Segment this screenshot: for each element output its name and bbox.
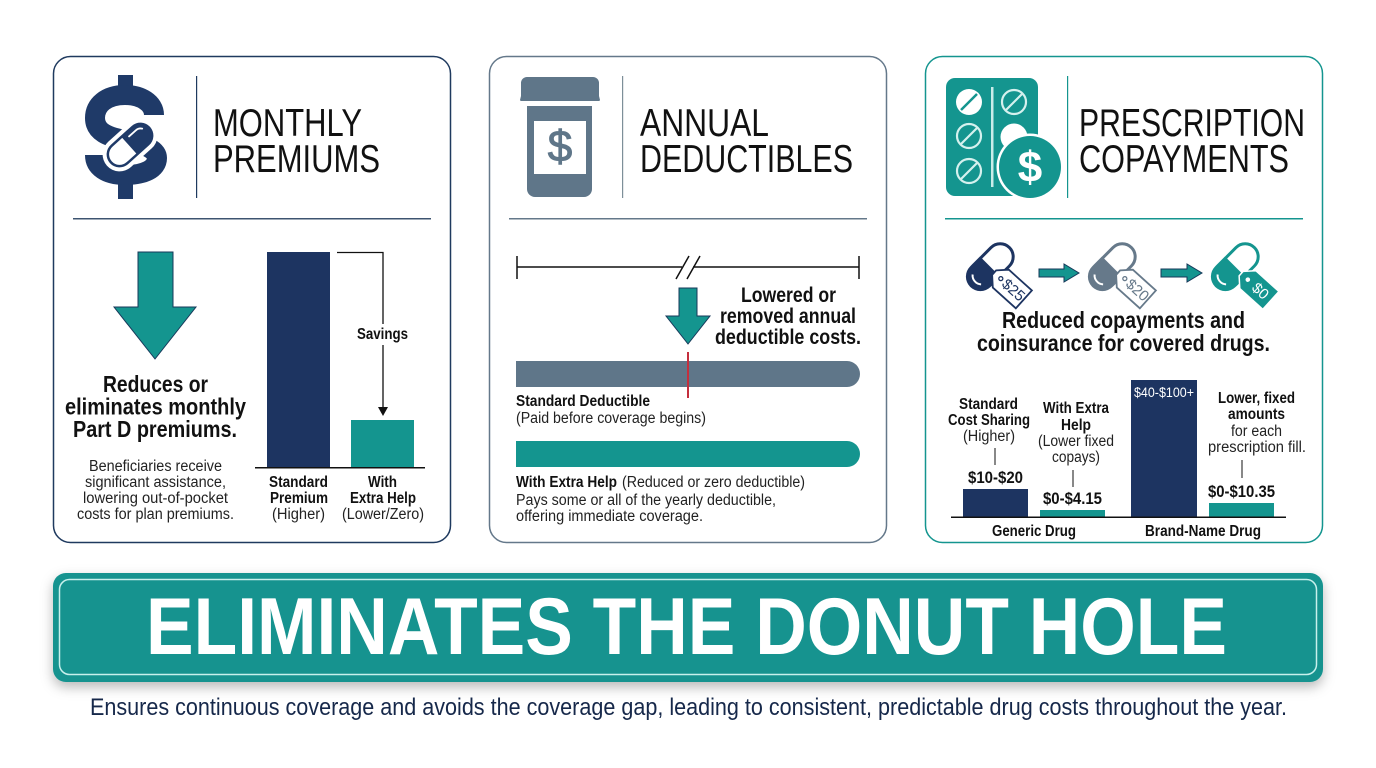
bar label: with extra help: With bbox=[368, 474, 397, 491]
label: standard deductible bbox=[516, 393, 706, 427]
bar: with extra help bbox=[516, 441, 860, 467]
label: standard deductible: (Paid before coverage begins) bbox=[516, 410, 706, 427]
bar: standard deductible bbox=[516, 352, 860, 398]
label: lower fixed amounts: amounts bbox=[1228, 406, 1285, 423]
arrow: first to second price bbox=[1039, 264, 1079, 282]
timeline with break bbox=[517, 256, 859, 279]
label: lower fixed amounts: for each bbox=[1231, 423, 1282, 440]
icon: teal capsule with $0 tag: $0 bbox=[1248, 279, 1272, 303]
text: lowered deductible: deductible costs. bbox=[715, 326, 861, 349]
label: generic with extra help: copays) bbox=[1052, 449, 1100, 466]
text: lowered deductible: removed annual bbox=[720, 305, 856, 328]
label: generic with extra help: Help bbox=[1061, 417, 1091, 434]
text: reduced copayments: Reduced copayments and bbox=[1002, 307, 1245, 333]
label: generic with extra help: $0-$4.15 bbox=[1043, 489, 1102, 508]
bar label: with extra help: Extra Help bbox=[350, 490, 416, 507]
banner: eliminates the donut hole: ELIMINATES THE DONUT HOLE bbox=[146, 582, 1227, 672]
bar label: standard premium: (Higher) bbox=[272, 506, 325, 523]
label: with extra help bbox=[516, 474, 805, 525]
text: reduces or eliminates bbox=[65, 371, 246, 442]
arrow: down to deductible bbox=[666, 288, 710, 344]
bar: brand-name standard bbox=[1131, 380, 1197, 517]
bar label: with extra help bbox=[342, 474, 424, 523]
bar label: with extra help: (Lower/Zero) bbox=[342, 506, 424, 523]
icon: blister pack with coin: $ bbox=[1018, 143, 1042, 192]
label: generic with extra help: With Extra bbox=[1043, 400, 1109, 417]
axis label: generic drug: Generic Drug bbox=[992, 523, 1076, 540]
label: with extra help: offering immediate coverage. bbox=[516, 508, 703, 525]
panel: monthly premiums bbox=[54, 56, 450, 542]
text: reduces or eliminates: eliminates monthly bbox=[65, 394, 246, 420]
bar chart: copayments by drug type bbox=[948, 380, 1306, 540]
icon: dollar sign with pill bbox=[95, 75, 164, 199]
text: beneficiaries description: significant assistance, bbox=[85, 474, 226, 491]
arrow: second to third price bbox=[1161, 264, 1202, 282]
heading: prescription copayments: COPAYMENTS bbox=[1079, 138, 1289, 181]
icon: navy capsule with $25 tag bbox=[960, 237, 1032, 308]
icon: grey capsule with $20 tag: $20 bbox=[1122, 276, 1152, 305]
icon: teal capsule with $0 tag bbox=[1205, 237, 1279, 309]
text: lowered deductible bbox=[715, 284, 861, 349]
text: reduced copayments: coinsurance for covered drugs. bbox=[977, 330, 1270, 356]
text: beneficiaries description: Beneficiaries receive bbox=[89, 458, 222, 475]
label: lower fixed amounts: prescription fill. bbox=[1208, 439, 1306, 456]
arrow: down bbox=[114, 252, 196, 359]
text: beneficiaries description bbox=[77, 458, 234, 523]
icon divider bbox=[196, 76, 197, 198]
label: standard deductible: Standard Deductible bbox=[516, 393, 650, 410]
label: lower fixed amounts: Lower, fixed bbox=[1218, 390, 1295, 407]
label: standard cost sharing: Standard bbox=[959, 396, 1018, 413]
text: reduced copayments bbox=[977, 307, 1270, 356]
savings arrow bbox=[337, 252, 408, 416]
heading: monthly premiums: MONTHLY bbox=[213, 102, 362, 145]
savings arrow: Savings bbox=[357, 326, 408, 343]
heading: annual deductibles: DEDUCTIBLES bbox=[640, 138, 853, 181]
label: with extra help: (Reduced or zero deductible) bbox=[622, 474, 805, 491]
icon: pill bottle with dollar bbox=[520, 77, 600, 197]
bar label: standard premium: Premium bbox=[270, 490, 328, 507]
label: standard cost sharing bbox=[948, 396, 1030, 487]
axis label: brand-name drug: Brand-Name Drug bbox=[1145, 523, 1261, 540]
text: reduces or eliminates: Part D premiums. bbox=[73, 416, 237, 442]
icon: grey capsule with $20 tag bbox=[1082, 237, 1156, 308]
icon: pill bottle with dollar: $ bbox=[548, 122, 572, 171]
panel: prescription copayments bbox=[926, 56, 1322, 542]
bar label: standard premium: Standard bbox=[269, 474, 328, 491]
label: with extra help: Pays some or all of the yearly deductible, bbox=[516, 492, 776, 509]
bar label: standard premium bbox=[269, 474, 328, 523]
label: standard cost sharing: Cost Sharing bbox=[948, 412, 1030, 429]
label: generic with extra help: (Lower fixed bbox=[1038, 433, 1114, 450]
text: beneficiaries description: costs for plan premiums. bbox=[77, 506, 234, 523]
bar chart: premium savings bbox=[255, 252, 425, 523]
label: standard cost sharing: $10-$20 bbox=[968, 468, 1023, 487]
heading: monthly premiums: PREMIUMS bbox=[213, 138, 380, 181]
heading: prescription copayments: PRESCRIPTION bbox=[1079, 102, 1305, 145]
text: beneficiaries description: lowering out-of-pocket bbox=[83, 490, 229, 507]
label: lower fixed amounts: $0-$10.35 bbox=[1208, 482, 1275, 501]
heading: annual deductibles: ANNUAL bbox=[640, 102, 769, 145]
label: generic with extra help bbox=[1038, 400, 1114, 508]
bar: brand-name standard: $40-$100+ bbox=[1134, 384, 1194, 400]
label: standard cost sharing: (Higher) bbox=[963, 428, 1015, 445]
text: reduces or eliminates: Reduces or bbox=[103, 371, 208, 397]
text: lowered deductible: Lowered or bbox=[741, 284, 836, 307]
icon: blister pack with coin bbox=[946, 78, 1064, 200]
panel: annual deductibles bbox=[490, 56, 886, 542]
heading: prescription copayments bbox=[1079, 102, 1305, 181]
label: with extra help: With Extra Help bbox=[516, 474, 617, 491]
icon: navy capsule with $25 tag: $25 bbox=[998, 276, 1028, 305]
heading: monthly premiums bbox=[213, 102, 380, 181]
label: lower fixed amounts bbox=[1208, 390, 1306, 501]
heading: annual deductibles bbox=[640, 102, 853, 181]
